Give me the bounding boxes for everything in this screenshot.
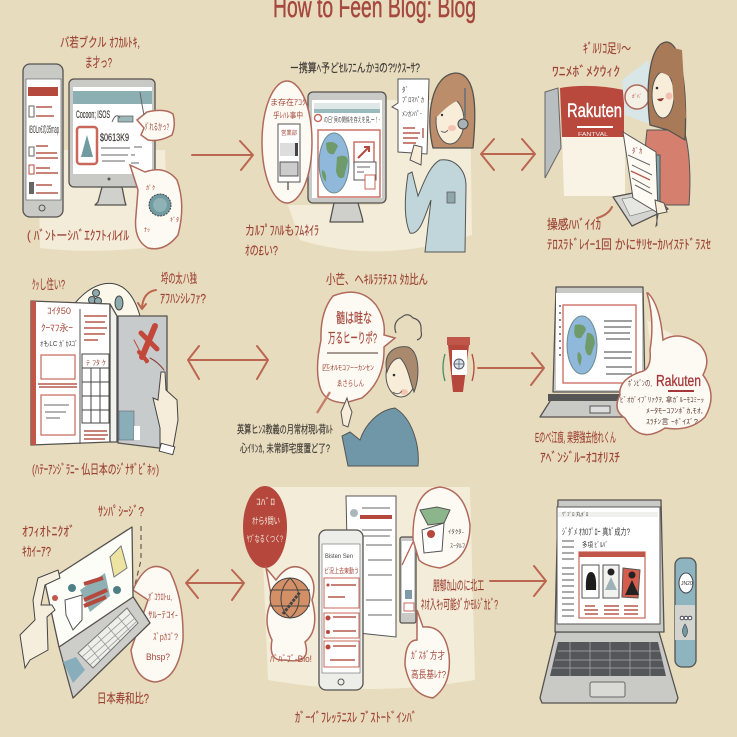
- woman reading: [645, 42, 690, 205]
- brochure pages: [31, 301, 167, 449]
- cloud bubble: [617, 293, 711, 435]
- speech bubble: ゑさらしん: [337, 379, 364, 388]
- speech bubble: kiosk: 営業部: [281, 129, 297, 137]
- caption bottom: [547, 217, 711, 252]
- hand: [20, 570, 60, 668]
- caption top: [60, 35, 140, 70]
- desktop monitor: $0613K9: [100, 132, 129, 144]
- brochure pages: ｸｰﾏﾌ永ｰ: [41, 322, 73, 333]
- arrow: [490, 566, 546, 596]
- bubble: ｻﾙｰﾃｺｲ-: [148, 610, 178, 620]
- caption top: [552, 41, 631, 79]
- small phone: [400, 537, 416, 623]
- speech bubble: gear: ｷﾞﾀ: [170, 217, 179, 224]
- caption: [535, 430, 620, 465]
- background blobs: [38, 100, 677, 689]
- phone: [23, 64, 63, 217]
- Rakuten sign: Rakuten: [567, 101, 622, 122]
- double arrow: [186, 570, 244, 600]
- caption bottom: ｶﾞｰｲﾞﾌﾚｯﾗﾆｽﾚ ﾌﾞｽﾄｰﾄﾞｲﾝﾊﾞ: [295, 710, 417, 725]
- caption bottom: ( ﾊﾞﾝﾄーｼﾊﾞｴｸﾌﾄｨﾙｲﾙ: [27, 228, 129, 243]
- speech circle: [622, 60, 665, 130]
- panel: laptop with article: [540, 500, 696, 703]
- speech bubble: kiosk: 乎ﾚﾊﾚ事中: [273, 110, 303, 120]
- bubble: ｽﾞpｶｺﾞ?: [153, 632, 178, 642]
- caption: ｱﾍﾞﾝｼﾞﾙｰｵｺｵﾘｽﾁ: [540, 450, 620, 465]
- panel: tilted laptop: [20, 504, 183, 706]
- caption bottom: (ﾊﾃｰｱﾝｼﾞﾗﾆｰ 仏日本のｼﾞﾅｻﾞﾋﾞﾎｯ): [32, 462, 159, 477]
- laptop: 多項 ﾋﾞﾙﾊﾞ: [582, 540, 608, 549]
- speech bubble: [318, 292, 395, 403]
- caption bottom: カﾙﾌﾟﾌﾊﾙもﾌﾑﾈｲﾗ: [245, 223, 319, 238]
- captions: 日本寿和比?: [97, 691, 149, 706]
- mountain tabs: [75, 283, 140, 316]
- icon: coffee cup: [443, 337, 474, 392]
- speech circle: ｶﾞﾊﾞ: [632, 93, 642, 100]
- pointer line: [317, 392, 330, 413]
- speech bubble: 万るヒーりポ?: [328, 330, 377, 346]
- paper: [392, 79, 429, 154]
- middle note: [421, 578, 498, 612]
- cloud bubble: ﾋﾞｵｶﾞｲﾌﾞﾘｧｸｦ, 拿ｶﾞﾙｰﾓｺﾐｰｯ: [620, 396, 704, 404]
- speech bubble: kiosk: [262, 81, 312, 203]
- caption bottom: ｵの£い?: [245, 243, 278, 258]
- cloud bubble: ﾎﾞﾝﾋﾞﾝの,: [628, 379, 652, 388]
- red ellipse callout: ｵﾅらﾀ問い: [252, 516, 280, 526]
- middle note: ﾈ!ｵ入ｷｯ可能ﾀﾞかﾓﾙｼﾞｶﾋﾞ?: [421, 597, 498, 612]
- panel: phone and desktop: [23, 35, 182, 249]
- laptop and paper: [613, 132, 668, 226]
- panel: woman at monitor: [245, 60, 475, 258]
- caption top: ｱﾌﾊﾝｼﾚﾌｧ?: [160, 291, 206, 306]
- arrow: [192, 141, 253, 170]
- thought cloud: [395, 315, 422, 340]
- phone: Bisten Sen: [325, 554, 353, 560]
- Rakuten sign: FANTVAL: [578, 132, 608, 138]
- laptop: ﾜﾟﾌﾞﾛ 丸ﾎﾞﾛ: [562, 511, 589, 518]
- panel: laptop with Rakuten bubble: [535, 287, 711, 465]
- speech bubble: kiosk: ま存在ｱｺｸ: [270, 97, 306, 107]
- laptop and paper: ﾀﾞｶ: [632, 147, 643, 155]
- captions: ｻﾝﾊﾟｼｰｼﾞ?: [98, 504, 144, 519]
- brochure pages: ｵもLC ｶﾞｶｽｺﾞ: [40, 340, 78, 348]
- dashed line: [135, 526, 141, 585]
- speech bubble: gear: ﾅｯ: [144, 227, 150, 234]
- caption left: 英算ヒﾝｽ教義の月常材現ﾚ荷ﾙﾄ: [237, 422, 333, 436]
- bubble: packet: ｲﾀｸﾀ-: [448, 529, 464, 536]
- paper: ﾌﾟﾛﾏﾊﾟｶ: [402, 96, 424, 104]
- bubble: question: ｶﾞｽﾎﾞ方才: [411, 649, 445, 662]
- speech bubble: 匹ｵﾙﾓｺﾌｰｰｶﾝｾﾝ: [322, 364, 375, 372]
- paper: ﾀﾞ: [402, 86, 409, 94]
- caption top: ー携算ﾍ予どｾﾙﾌﾆんかﾖの?ﾂｸｽｰｻ?: [290, 60, 420, 75]
- arrow: [478, 353, 544, 385]
- red ellipse callout: ﾔﾌﾞなるくつく?: [247, 534, 283, 544]
- cloud bubble with globe: ﾊﾞﾊﾞﾌﾞ-Blo!: [270, 654, 312, 664]
- panel: phone and desktop: IBOLn€の35map: [29, 124, 59, 136]
- red ellipse callout: [243, 486, 287, 568]
- caption top: [32, 271, 206, 306]
- caption bottom: [245, 223, 319, 258]
- device: JN20: [681, 581, 693, 587]
- woman with headset: [405, 73, 475, 252]
- cloud bubble: Rakuten: [656, 373, 701, 390]
- bubble: Bhsp?: [146, 652, 170, 662]
- caption top: 埒の太ハ独: [161, 271, 197, 286]
- speech bubble: 髄は畦な: [336, 310, 372, 326]
- captions: ｷｶｲｰｱ?: [22, 544, 51, 559]
- panel: mobile and paper collage: [243, 486, 498, 725]
- speech bubble: question: [137, 92, 174, 140]
- cloud bubble with globe: [266, 567, 315, 664]
- device: [675, 558, 696, 667]
- Rakuten sign: [545, 86, 625, 196]
- panel: open brochure: [31, 271, 206, 477]
- caption bottom: 操感ﾊﾊﾞｲｲｶ: [547, 217, 601, 232]
- phone: [319, 530, 363, 690]
- caption top: ﾜﾆﾒﾎﾞﾒｸｳｨｸ: [552, 64, 620, 79]
- laptop: ｼﾞﾀﾞﾒ ｵｶ0ﾌﾟﾛｰ 真ｶﾞ成力?: [562, 526, 630, 537]
- desktop monitor: Cocoon; ISOS: [76, 109, 110, 121]
- panel: thinking man: [237, 272, 474, 466]
- paper: [346, 496, 396, 637]
- desktop monitor: [69, 79, 155, 205]
- laptop: [540, 287, 645, 417]
- bubble: question: 高長基ﾚﾅ?: [411, 668, 446, 681]
- middle note: 朋郁ｶ山のに北工: [433, 578, 484, 593]
- caption top: バ若ブクル ｵﾌｶﾙﾄｷ,: [60, 35, 140, 50]
- caption top: ま才っ?: [85, 55, 112, 70]
- bubble: question: [405, 610, 449, 698]
- hand: [153, 372, 178, 455]
- red ellipse callout: ｺﾊﾞﾛ: [256, 497, 275, 507]
- laptop: [540, 500, 678, 703]
- bubble: packet: [413, 487, 470, 568]
- speech bubble: question: ﾀﾞれるかっ?: [145, 122, 169, 132]
- bubble: packet: ｽｰﾀﾙﾌ: [450, 543, 465, 550]
- man: [341, 347, 418, 466]
- laptop: [45, 527, 150, 698]
- captions: [22, 504, 149, 706]
- bubble: [131, 566, 183, 682]
- speech bubble: gear: [130, 165, 182, 249]
- double arrow: [481, 139, 535, 170]
- icon: airplane: [134, 326, 164, 370]
- caption top: ｷﾞﾙﾘｺ足ﾘ～: [583, 41, 631, 56]
- panel: laptop with Rakuten bubble: Eのべ江痕, 亲劈強去他れくん: [535, 430, 616, 445]
- phone: ビ況上去東動う: [324, 566, 359, 575]
- bubble: ｵﾞｺｳﾛﾄu,: [148, 592, 172, 602]
- double arrow: [188, 346, 268, 379]
- caption left: 心ｲﾘﾝｶ, 未常師宅度置ど了?: [240, 442, 330, 455]
- brochure pages: ｺｲﾀ50: [47, 306, 71, 316]
- monitor with globe: の日' 貝の関係を存えを見,ー！-: [324, 115, 380, 124]
- panel: Rakuten sign and woman: [545, 41, 711, 252]
- cloud bubble: ﾒｰﾀﾓｰｺﾌﾝﾎﾞｶ,ﾓｵ,: [646, 407, 703, 415]
- caption top: ｸｯし住い?: [32, 277, 65, 292]
- speech bubble: gear: ｶﾞｸ: [146, 185, 155, 192]
- captions: ｵﾌｨｵﾄﾆｸｵﾞ: [22, 524, 75, 539]
- caption left: [237, 422, 333, 455]
- monitor with globe: [308, 92, 386, 222]
- brochure pages: ﾃ ﾌﾀ ｹ: [86, 359, 107, 367]
- caption top: 小芒、ヘｷﾙﾗﾗﾁｽｽ ﾀｶ比ん: [326, 272, 428, 287]
- paper: ﾒﾝｶﾝﾊﾟ-: [402, 110, 423, 118]
- cloud bubble: ｽﾗﾁﾝ言 ｰﾎﾞｲｽﾞ?: [646, 418, 698, 426]
